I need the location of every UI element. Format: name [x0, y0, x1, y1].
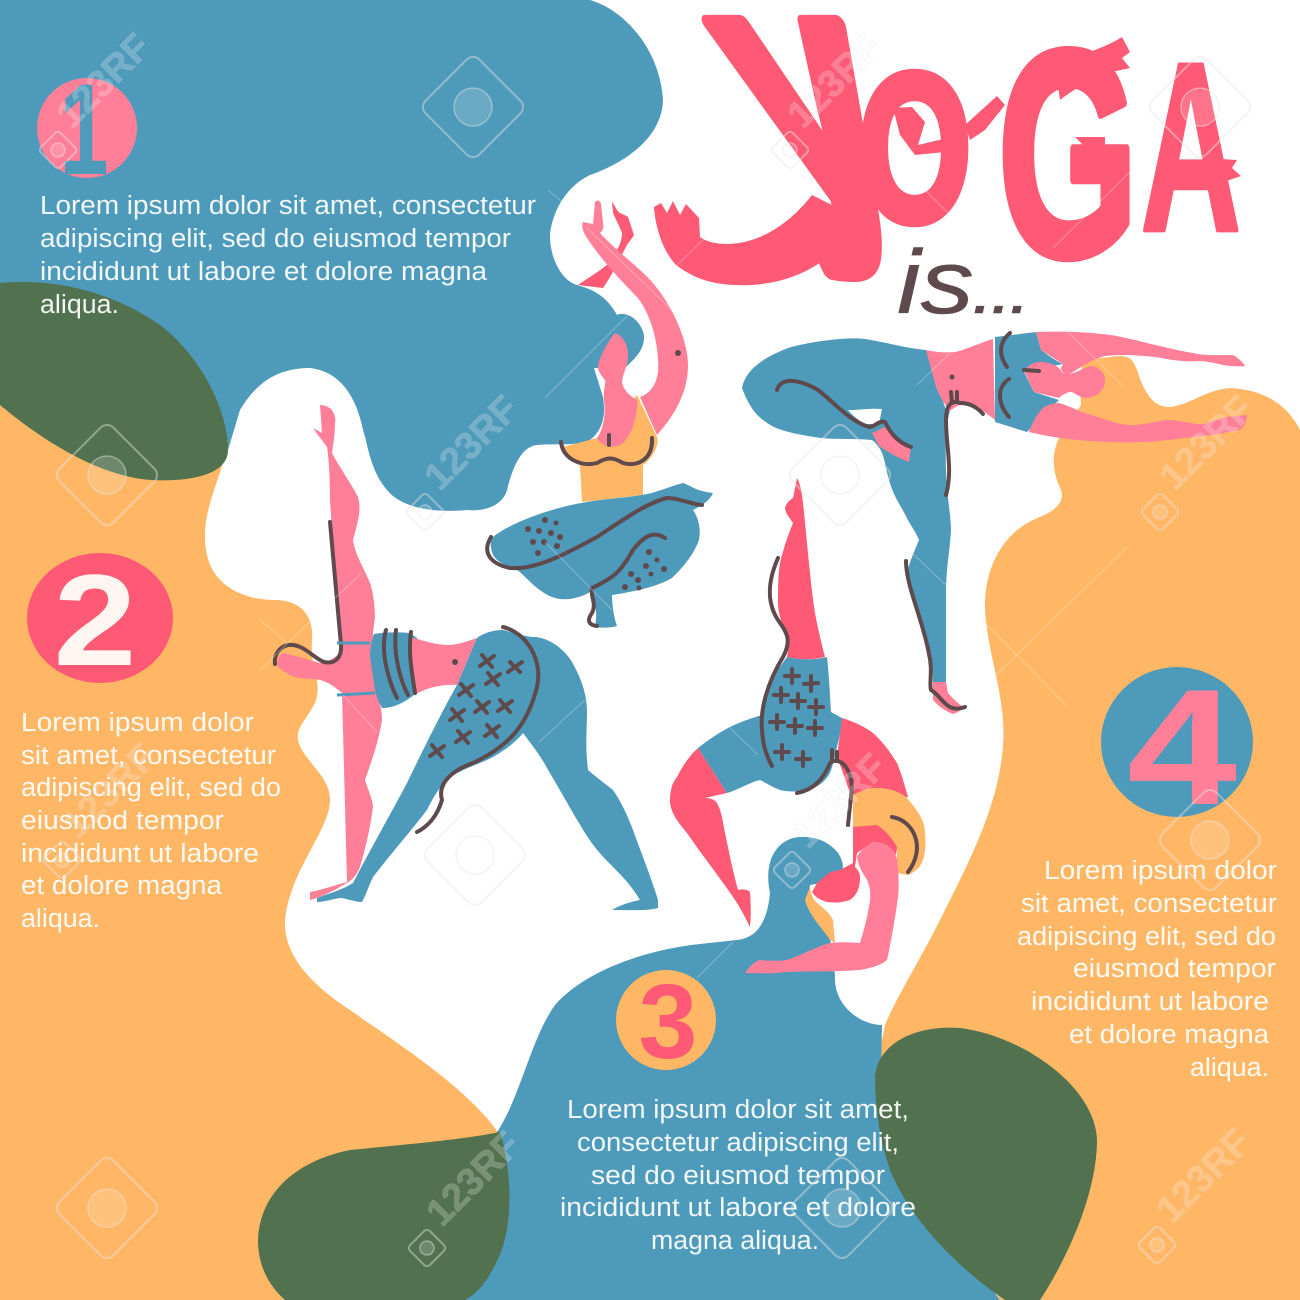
text block 3	[560, 1096, 916, 1255]
text block 1: adipiscing elit, sed do eiusmod tempor	[40, 225, 512, 253]
watermark text: 123RF	[1152, 388, 1262, 498]
watermark text: 123RF	[1149, 1121, 1259, 1231]
text block 3: sed do eiusmod tempor	[591, 1162, 886, 1190]
text block 1: aliqua.	[40, 291, 119, 319]
background blob: right orange	[875, 356, 1300, 1300]
text block 4: incididunt ut labore	[1031, 988, 1269, 1016]
text block 4: aliqua.	[1190, 1054, 1269, 1082]
title: YOGA	[651, 0, 1241, 318]
title: YOGA: O	[858, 29, 972, 266]
text block 4: eiusmod tempor	[1073, 955, 1277, 983]
title: is...: is...	[897, 232, 1030, 332]
text block 3: magna aliqua.	[651, 1227, 819, 1255]
watermark text: 123RF	[419, 1124, 529, 1234]
figure 2: standing balance pose with arms outstretched	[742, 332, 1247, 714]
text block 2: sit amet, consectetur	[21, 742, 277, 770]
watermark text: 123RF	[785, 746, 895, 856]
badge 4: 4	[1127, 655, 1237, 839]
watermark text: 123RF	[55, 736, 165, 846]
text block 3: incididunt ut labore et dolore	[560, 1194, 916, 1222]
text block 2	[21, 709, 281, 933]
text block 4: Lorem ipsum dolor	[1044, 857, 1278, 885]
text block 4	[1017, 857, 1278, 1082]
badge 1: 1	[59, 56, 109, 202]
text block 2: adipiscing elit, sed do	[21, 774, 281, 802]
watermark text: 123RF	[49, 26, 159, 136]
watermark text: 123RF	[780, 26, 890, 136]
background blob: bottom-right green	[875, 1028, 1097, 1300]
text block 2: eiusmod tempor	[21, 807, 225, 835]
text block 4: et dolore magna	[1069, 1021, 1270, 1049]
watermark text: 123RF	[417, 388, 527, 498]
text block 3: consectetur adipiscing elit,	[577, 1129, 899, 1157]
text block 2: incididunt ut labore	[21, 840, 259, 868]
text block 2: et dolore magna	[21, 872, 223, 900]
text block 4: adipiscing elit, sed do	[1017, 923, 1276, 951]
background blob: bottom-left green	[258, 1132, 510, 1300]
figure 1: seated lotus pose with crossed arms	[487, 201, 713, 628]
badge 3: 3	[639, 963, 697, 1081]
text block 1	[40, 192, 537, 319]
text block 1: incididunt ut labore et dolore magna	[40, 258, 488, 286]
background blob: left orange	[0, 400, 500, 1300]
background blob: top-left blue	[0, 0, 663, 511]
badge 1	[37, 56, 137, 202]
badge 2	[27, 547, 173, 693]
text block 3: Lorem ipsum dolor sit amet,	[567, 1096, 909, 1124]
badge 2: 2	[53, 547, 137, 693]
background blob: bottom blue	[460, 837, 1000, 1300]
text block 4: sit amet, consectetur	[1021, 890, 1278, 918]
title: YOGA: A	[1141, 14, 1241, 281]
figure 3: triangle pose	[275, 405, 658, 910]
badge 3	[616, 963, 716, 1081]
text block 2: Lorem ipsum dolor	[21, 709, 255, 737]
figure 4: backbend wheel pose with raised leg	[670, 478, 925, 973]
text block 2: aliqua.	[21, 905, 100, 933]
background blob: top-left green	[0, 282, 228, 480]
text block 1: Lorem ipsum dolor sit amet, consectetur	[40, 192, 537, 220]
